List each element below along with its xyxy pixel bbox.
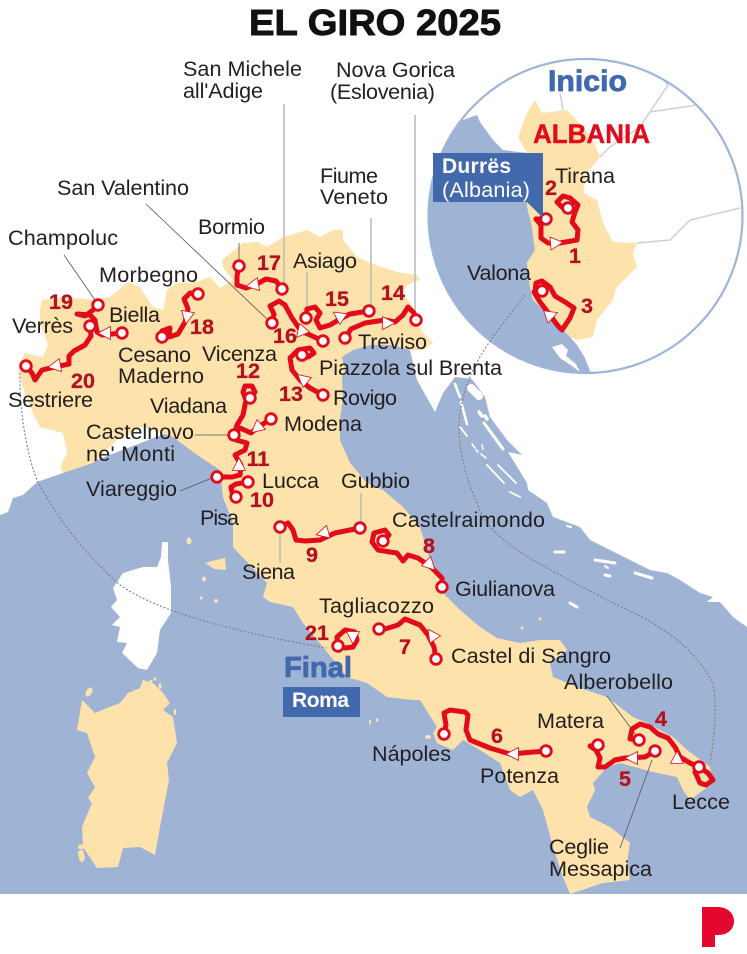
leader lines: [64, 104, 652, 848]
city labels: Tagliacozzo: [319, 593, 434, 618]
stage numbers: 2: [545, 176, 557, 200]
city labels: ne' Monti: [86, 441, 175, 466]
island: Corsica: [111, 542, 171, 670]
stage numbers: 21: [305, 621, 329, 645]
country label: Albania: ALBANIA: [533, 119, 650, 149]
stage 18: [162, 293, 198, 337]
city labels: Biella: [109, 302, 161, 327]
city labels: Pisa: [200, 505, 240, 530]
stage numbers: 20: [71, 369, 95, 393]
stage numbers: 18: [190, 315, 214, 339]
stage 15: [306, 307, 369, 328]
callout: Roma finish: Roma: [292, 689, 349, 712]
island: Sardinia: [77, 680, 177, 868]
city labels: Ceglie: [549, 834, 609, 859]
city labels: Treviso: [358, 329, 427, 354]
stage 8: [372, 530, 442, 587]
stage 14: [345, 307, 416, 338]
city labels: Sestriere: [8, 387, 93, 412]
callout: Roma finish: [283, 687, 360, 717]
city labels: Veneto: [320, 184, 388, 209]
city labels: Vicenza: [202, 341, 278, 366]
city labels: (Eslovenia): [330, 79, 435, 104]
city labels: Siena: [242, 559, 296, 584]
stage 4: [630, 724, 713, 785]
city labels: Nova Gorica: [336, 57, 456, 82]
city labels: Cesano: [118, 342, 191, 367]
city labels: Alberobello: [564, 669, 673, 694]
city labels: Giulianova: [455, 576, 556, 601]
city labels: San Michele: [183, 56, 302, 81]
city labels: Lucca: [262, 468, 320, 493]
title: EL GIRO 2025: [249, 2, 501, 43]
stage 1: [536, 198, 578, 243]
city labels: Tirana: [555, 163, 616, 188]
city labels: Matera: [537, 708, 605, 733]
stage 21: [337, 630, 357, 648]
stage 13: [290, 348, 323, 395]
stage numbers: 3: [581, 294, 593, 318]
city labels: Potenza: [480, 763, 560, 788]
stage 19: [77, 305, 122, 335]
city labels: Messapica: [549, 856, 653, 881]
city labels: Fiume: [320, 163, 378, 188]
sea: [0, 345, 747, 894]
route connection: Valona to Lecce dotted line: [459, 295, 715, 763]
stage numbers: 11: [247, 447, 269, 471]
direction arrows: [47, 236, 683, 764]
stage numbers: 14: [381, 281, 405, 305]
stage numbers: 16: [273, 324, 297, 348]
city labels: Viadana: [150, 393, 228, 418]
city labels: all'Adige: [183, 78, 263, 103]
stage 20: [26, 326, 91, 380]
city labels: Castelnovo: [86, 419, 194, 444]
city labels: Valona: [467, 260, 532, 285]
callout: Durrës start: (Albania): [442, 177, 530, 202]
stage 6: [444, 710, 546, 754]
city labels: Morbegno: [99, 262, 198, 287]
stage 17: [237, 266, 282, 289]
city labels: Asiago: [293, 248, 357, 273]
stage 7: [379, 619, 436, 659]
stage 11: [217, 435, 247, 477]
route connection: Rome to Sestriere dotted line: [20, 373, 327, 648]
city labels: Modena: [284, 411, 363, 436]
heading: Inicio: Inicio: [548, 65, 627, 98]
stage 10: [231, 482, 248, 497]
city labels: Gubbio: [341, 468, 410, 493]
stage numbers: 12: [236, 359, 260, 383]
city labels: Maderno: [118, 363, 204, 388]
stage 11b: Modena spur: [234, 419, 271, 435]
stage numbers: 4: [655, 707, 667, 731]
city labels: Bormio: [198, 214, 265, 239]
stage numbers: 19: [49, 290, 73, 314]
city labels: Rovigo: [333, 385, 397, 410]
callout: Durrës start: [433, 153, 543, 218]
stage numbers: 13: [279, 382, 303, 406]
landmass: Italy: [18, 230, 713, 894]
small islands: [78, 538, 542, 863]
stage numbers: [49, 176, 667, 791]
stage numbers: 10: [250, 488, 274, 512]
routes: [26, 196, 713, 785]
stage numbers: 7: [399, 635, 411, 659]
stage 3: [534, 281, 574, 330]
city labels: Piazzola sul Brenta: [319, 355, 503, 380]
inset: Albania circle: [420, 59, 742, 380]
city labels: Castelraimondo: [392, 507, 545, 532]
stage numbers: 9: [306, 543, 318, 567]
stage numbers: 5: [619, 767, 631, 791]
city labels: Champoluc: [8, 225, 118, 250]
heading: Final: Final: [284, 652, 352, 684]
city labels: Nápoles: [372, 741, 451, 766]
city labels: Castel di Sangro: [451, 643, 611, 668]
stage numbers: 15: [325, 287, 349, 311]
city labels: Verrès: [12, 313, 73, 338]
stage numbers: 17: [257, 251, 281, 275]
stage numbers: 6: [491, 724, 503, 748]
stage 2: [557, 196, 570, 210]
icon: publisher P logo: [702, 907, 734, 947]
stage 9: [280, 523, 360, 541]
stage numbers: 1: [569, 244, 581, 268]
city labels: Viareggio: [86, 476, 177, 501]
stage numbers: 8: [423, 534, 435, 558]
circle outline: [428, 59, 742, 373]
stage markers: [21, 203, 704, 772]
city labels: San Valentino: [57, 175, 189, 200]
callout: Durrës start: Durrës: [442, 155, 511, 178]
stage 5: [590, 745, 655, 767]
city labels: Lecce: [672, 789, 730, 814]
stage 16: [270, 301, 323, 341]
stage 12: [234, 386, 255, 435]
